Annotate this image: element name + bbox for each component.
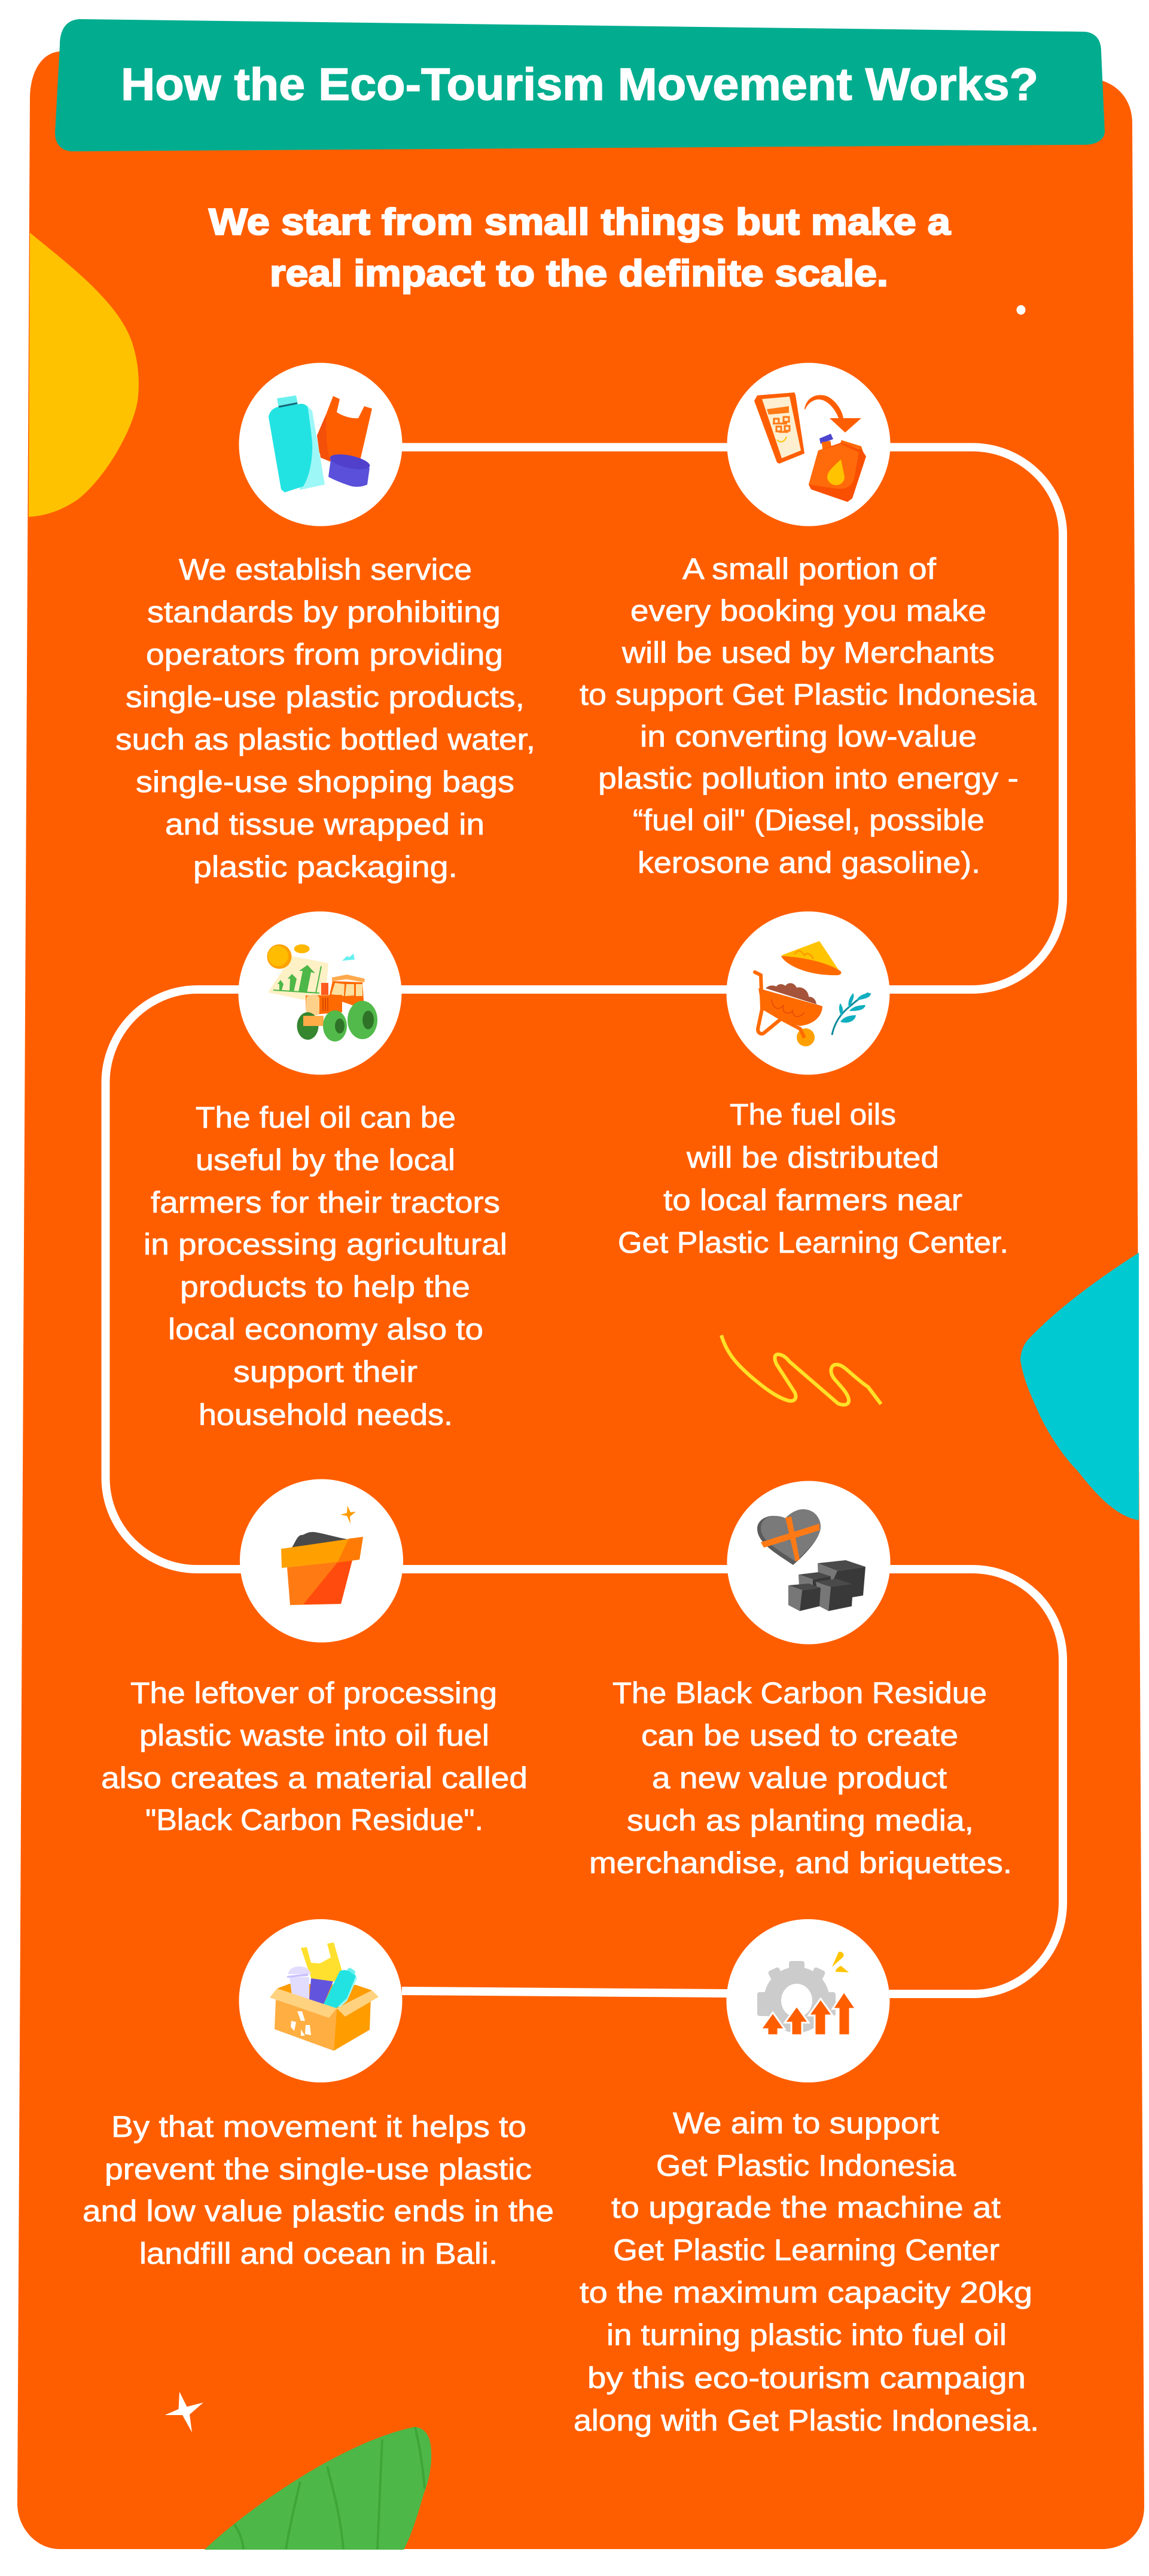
step 8 text: by this eco-tourism campaign [587, 2361, 1026, 2395]
step 5 text: plastic waste into oil fuel [139, 1719, 489, 1752]
subtitle [209, 202, 951, 294]
step 2 text: will be used by Merchants [621, 636, 995, 669]
step 3 text: The fuel oil can be [196, 1101, 456, 1134]
step 1 text: We establish service [179, 553, 472, 586]
step 3 text: farmers for their tractors [151, 1186, 500, 1219]
step 5 text [101, 1676, 528, 1837]
step 6 text: such as planting media, [627, 1804, 974, 1837]
step 6 text: The Black Carbon Residue [612, 1676, 987, 1710]
step 3 text: products to help the [180, 1270, 470, 1304]
step 8 text: along with Get Plastic Indonesia. [574, 2404, 1039, 2437]
step 1 text: operators from providing [146, 638, 503, 671]
subtitle: real impact to the definite scale. [270, 253, 888, 294]
title banner [55, 19, 1105, 151]
step 3 text: support their [233, 1355, 417, 1389]
step 2 text: in converting low-value [640, 720, 977, 753]
step 4 text [618, 1098, 1008, 1259]
step 6: icon charcoal heart and briquettes [727, 1481, 890, 1644]
decoration: white dot [1017, 305, 1025, 315]
step 5: icon bucket of residue [240, 1479, 403, 1643]
step 4 text: to local farmers near [663, 1183, 962, 1217]
step 4 text: Get Plastic Learning Center. [618, 1226, 1008, 1259]
step 1 text: single-use plastic products, [126, 680, 525, 714]
step 4 text: The fuel oils [730, 1098, 896, 1131]
step 2 text: “fuel oil" (Diesel, possible [633, 803, 985, 837]
decoration: yellow blob [29, 233, 139, 517]
step 7 text: By that movement it helps to [111, 2110, 526, 2143]
step 3 text: local economy also to [168, 1313, 483, 1346]
step 8 text: in turning plastic into fuel oil [606, 2318, 1007, 2352]
step 8 text: to upgrade the machine at [611, 2191, 1001, 2224]
step 2: icon phone QR and fuel can [727, 363, 890, 526]
subtitle: We start from small things but make a [209, 202, 951, 243]
step 6 text: can be used to create [641, 1719, 958, 1752]
step 7 text: landfill and ocean in Bali. [139, 2237, 498, 2270]
step 3 text: household needs. [199, 1398, 453, 1432]
step 3 text: useful by the local [196, 1143, 455, 1177]
step 2 text: A small portion of [682, 552, 936, 586]
step 6 text: a new value product [652, 1761, 947, 1795]
step 8 text: Get Plastic Indonesia [656, 2149, 956, 2182]
step 1: icon plastic items [239, 363, 402, 526]
step 1 text: standards by prohibiting [147, 595, 501, 629]
step 5 text: "Black Carbon Residue". [145, 1803, 483, 1837]
step 1 text: plastic packaging. [193, 850, 458, 884]
step 2 text: plastic pollution into energy - [598, 762, 1019, 795]
title: How the Eco-Tourism Movement Works? [121, 59, 1038, 110]
step 8 text: Get Plastic Learning Center [613, 2233, 999, 2267]
step 8: icon gear and rising arrows [726, 1919, 890, 2082]
connector path between steps [105, 447, 1063, 1994]
step 2 text [580, 552, 1037, 879]
step 7 text: and low value plastic ends in the [83, 2194, 554, 2228]
step 6 text: merchandise, and briquettes. [589, 1846, 1012, 1880]
step 4: icon hat wheelbarrow and plant [726, 912, 890, 1074]
step 7 text [83, 2110, 554, 2270]
step 6 text [589, 1676, 1012, 1880]
step 1 text: and tissue wrapped in [165, 808, 484, 841]
step 1 text [115, 553, 535, 884]
step 3: icon tractor and growth chart [238, 912, 402, 1074]
step 2 text: to support Get Plastic Indonesia [580, 678, 1037, 711]
step 2 text: every booking you make [630, 594, 986, 628]
step 3 text: in processing agricultural [144, 1228, 507, 1261]
step 7 text: prevent the single-use plastic [105, 2152, 532, 2186]
step 8 text: We aim to support [673, 2106, 939, 2140]
decoration: teal blob [1020, 1253, 1139, 1520]
step 3 text [144, 1101, 507, 1432]
decoration: yellow squiggle [721, 1335, 881, 1405]
step 8 text [574, 2106, 1039, 2437]
step 5 text: also creates a material called [101, 1761, 528, 1795]
step 5 text: The leftover of processing [130, 1676, 497, 1710]
step 8 text: to the maximum capacity 20kg [580, 2276, 1032, 2309]
step 1 text: single-use shopping bags [136, 765, 514, 799]
decoration: white sparkle [165, 2392, 203, 2432]
decoration: green leaf [205, 2427, 431, 2550]
step 1 text: such as plastic bottled water, [115, 723, 535, 756]
step 2 text: kerosone and gasoline). [638, 846, 980, 879]
step 4 text: will be distributed [686, 1141, 939, 1174]
step 7: icon recycling box [239, 1919, 402, 2082]
